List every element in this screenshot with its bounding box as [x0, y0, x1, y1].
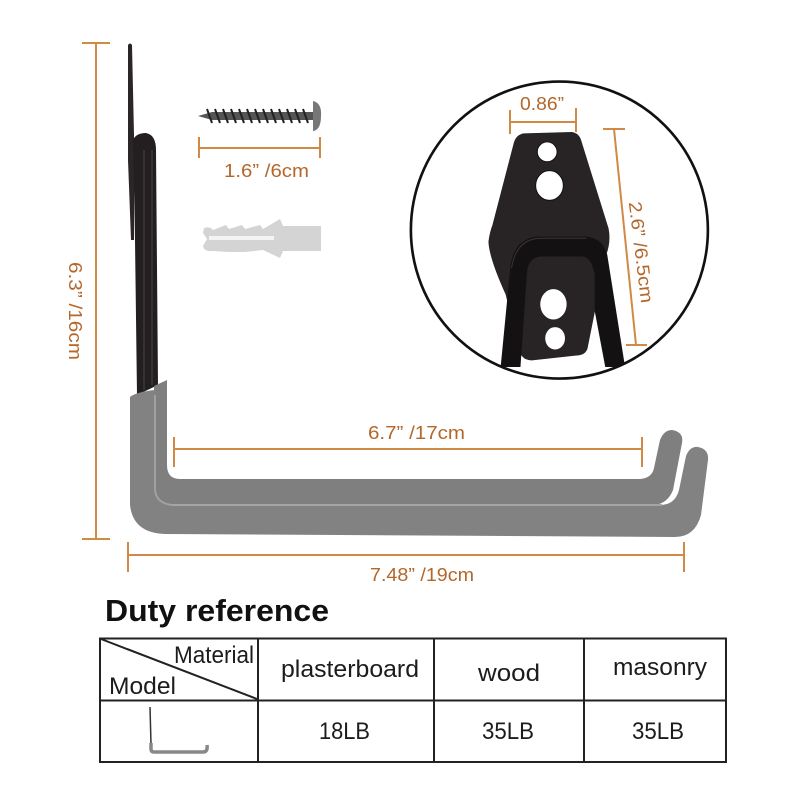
rod loop: [501, 237, 625, 367]
table icon: hook: [150, 707, 207, 752]
wall anchor: [203, 219, 321, 258]
table: masonry: [613, 654, 707, 681]
dimension: inner length: 6.7” /17cm: [368, 423, 465, 443]
table: 35LB: [482, 718, 534, 745]
wall plate: [128, 44, 134, 240]
dimension: overall height: 6.3” /16cm: [65, 262, 85, 360]
heading: Duty reference: [105, 593, 329, 628]
table: plasterboard: [281, 656, 419, 683]
hook side view: [128, 44, 708, 537]
rear gray hook: [154, 380, 682, 505]
table: [100, 638, 726, 762]
detail circle: [411, 82, 708, 379]
dimension: plate width: 0.86”: [520, 94, 564, 114]
black rods: [133, 133, 158, 395]
dimension: overall height: [65, 43, 110, 539]
dimension: plate width: [510, 94, 576, 134]
table: wood: [477, 660, 540, 687]
dimension: inner length: [174, 423, 642, 467]
plate holes: [537, 142, 557, 162]
dimension: overall length: [128, 542, 684, 585]
header labels: Material: [174, 642, 254, 669]
front gray hook: [130, 390, 708, 537]
dimension: screw length: [199, 137, 320, 181]
values: 18LB: [319, 718, 370, 745]
table: 35LB: [632, 718, 684, 745]
dimension: overall length: 7.48” /19cm: [370, 565, 474, 585]
mounting plate: [488, 132, 609, 360]
screw: [198, 101, 321, 131]
dimension: plate height: [603, 129, 657, 345]
table: Model: [109, 673, 176, 700]
dimension: plate height: 2.6” /6.5cm: [625, 200, 657, 304]
dimension: screw length: 1.6” /6cm: [224, 161, 309, 181]
